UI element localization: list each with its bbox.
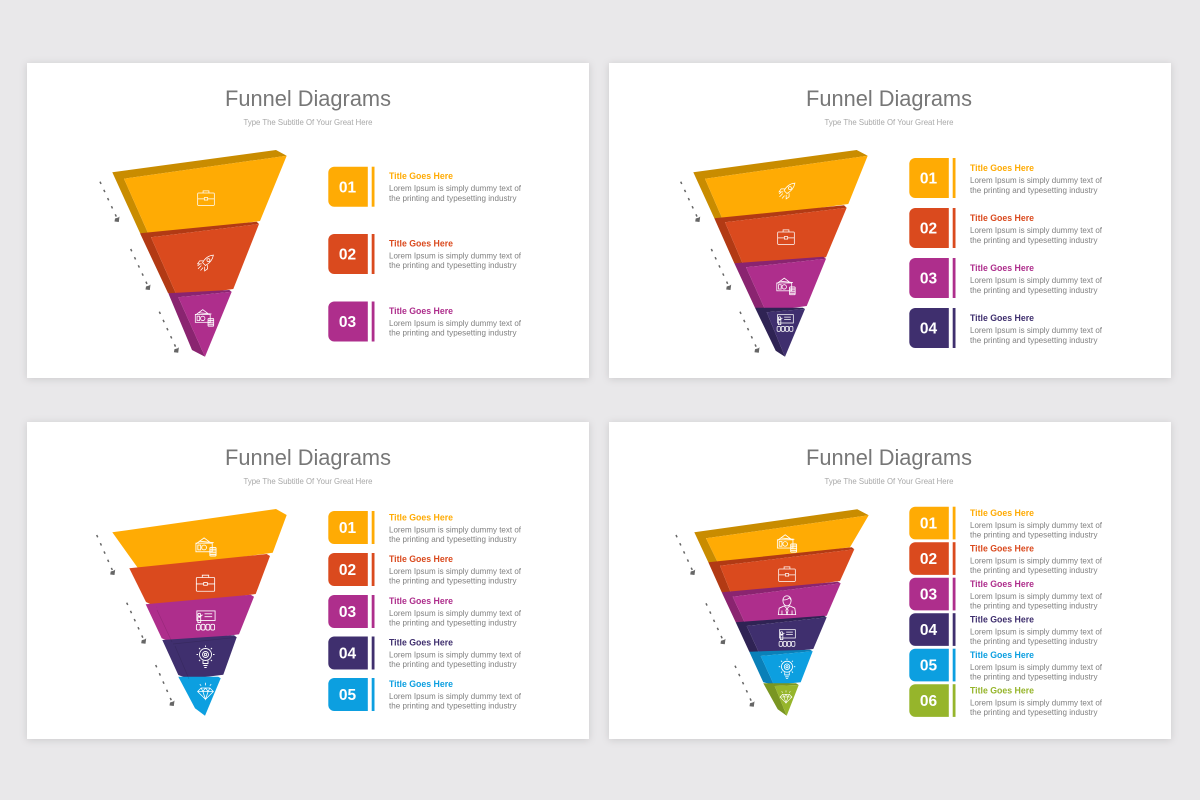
title: Funnel Diagrams [806,86,972,111]
arrows: dashed guides [97,535,174,706]
item 05: the printing and typesetting industry [389,700,517,710]
item 02: Title Goes Here [389,238,453,248]
item 02: Lorem Ipsum is simply dummy text of [970,225,1103,235]
icon: rocket [779,183,795,199]
item 03: Lorem Ipsum is simply dummy text of [970,591,1103,601]
item 01 [909,507,1103,539]
item 01: the printing and typesetting industry [389,193,517,203]
title: Funnel Diagrams [225,86,391,111]
item 04: Title Goes Here [970,313,1034,323]
item 05: Lorem Ipsum is simply dummy text of [970,662,1103,672]
item 04: Lorem Ipsum is simply dummy text of [389,650,522,660]
item 04: 04 [920,622,937,639]
item 03: 03 [339,314,356,331]
subtitle: Type The Subtitle Of Your Great Here [824,476,954,486]
item 01: Title Goes Here [389,512,453,522]
item 02: Lorem Ipsum is simply dummy text of [389,566,522,576]
item 04: the printing and typesetting industry [970,636,1098,646]
item 05: Title Goes Here [389,679,453,689]
item 03: the printing and typesetting industry [970,285,1098,295]
item 01: Lorem Ipsum is simply dummy text of [970,520,1103,530]
panel: six-step funnel slide [609,422,1171,739]
funnel: three layers [112,150,287,357]
item 01: the printing and typesetting industry [970,185,1098,195]
item 06: Lorem Ipsum is simply dummy text of [970,698,1103,708]
item 01: 01 [339,520,356,537]
icon: presentation [777,315,793,331]
item 02 [909,542,1103,575]
item 04: Lorem Ipsum is simply dummy text of [970,325,1103,335]
icon: presentation [196,611,215,630]
icon: wallet [196,538,216,556]
item 03: the printing and typesetting industry [389,618,517,628]
item 04 [909,613,1103,646]
icon: light bulb [196,646,214,668]
item 03: 03 [339,604,356,621]
item 05: Lorem Ipsum is simply dummy text of [389,691,522,701]
item 02: the printing and typesetting industry [970,235,1098,245]
item 04: 04 [920,321,937,338]
item 01: Lorem Ipsum is simply dummy text of [970,175,1103,185]
funnel: six layers [694,509,869,716]
arrows: dashed guides [100,182,179,353]
panel: three-step funnel slide [27,63,589,378]
item 01: Title Goes Here [970,508,1034,518]
item 04: the printing and typesetting industry [970,335,1098,345]
item 01: the printing and typesetting industry [970,529,1098,539]
icon: person [778,596,796,615]
icon: briefcase [779,567,795,582]
item 01: 01 [920,516,937,533]
arrows: dashed guides [681,182,760,353]
icon: wallet [777,535,797,552]
item 02 [909,208,1103,248]
icon: diamond [780,690,792,703]
icon: briefcase [778,230,794,244]
item 03: Lorem Ipsum is simply dummy text of [389,318,522,328]
subtitle: Type The Subtitle Of Your Great Here [244,117,373,127]
funnel: four layers [693,150,868,357]
icon: rocket [198,255,213,271]
title: Funnel Diagrams [225,445,391,470]
item 06: the printing and typesetting industry [970,707,1098,717]
item 06: Title Goes Here [970,686,1034,696]
item 06: 06 [920,693,937,710]
item 02 [328,553,522,586]
item 01: 01 [920,171,937,188]
icon: presentation [779,630,795,646]
item 05 [909,649,1103,681]
item 03 [909,578,1103,610]
item 02: the printing and typesetting industry [970,565,1098,575]
item 02: 02 [339,247,356,264]
item 03: Lorem Ipsum is simply dummy text of [970,275,1103,285]
item 03 [909,258,1103,298]
item 04: 04 [339,646,356,662]
item 03: 03 [920,271,937,288]
item 02: the printing and typesetting industry [389,260,517,270]
item 03: Title Goes Here [389,596,453,606]
item 04 [328,636,522,670]
item 01 [328,511,522,544]
item 02 [328,234,522,274]
icon: briefcase [198,191,214,206]
item 01: Title Goes Here [389,171,453,181]
item 02: Title Goes Here [389,554,453,564]
icon: diamond [198,683,213,699]
icon: wallet [195,310,214,326]
item 02: Title Goes Here [970,213,1034,223]
arrows: dashed guides [676,535,754,707]
item 03: Lorem Ipsum is simply dummy text of [389,608,522,618]
item 03: Title Goes Here [970,579,1034,589]
panel: five-step funnel slide [27,422,589,739]
item 04 [909,308,1103,348]
item 02: the printing and typesetting industry [389,576,517,586]
item 02: Lorem Ipsum is simply dummy text of [970,556,1103,566]
item 04: the printing and typesetting industry [389,659,517,669]
icon: wallet [777,278,795,295]
item 01 [328,167,522,207]
panel: four-step funnel slide [609,63,1171,378]
item 01: Lorem Ipsum is simply dummy text of [389,183,522,193]
item 03: Title Goes Here [970,263,1034,273]
item 04: Lorem Ipsum is simply dummy text of [970,626,1103,636]
item 03: Title Goes Here [389,306,453,316]
item 02: 02 [920,551,937,568]
item 01: 01 [339,179,356,196]
item 04: Title Goes Here [970,614,1034,624]
item 05 [328,678,522,711]
icon: briefcase [196,575,215,591]
item 05: 05 [920,658,937,675]
subtitle: Type The Subtitle Of Your Great Here [824,117,954,127]
item 01: Lorem Ipsum is simply dummy text of [389,524,522,534]
item 06 [909,684,1103,717]
item 02: Lorem Ipsum is simply dummy text of [389,250,522,260]
item 01: the printing and typesetting industry [389,534,517,544]
item 05: the printing and typesetting industry [970,671,1098,681]
funnel: five layers [112,509,287,716]
item 01: Title Goes Here [970,163,1034,173]
icon: light bulb [779,658,795,679]
item 02: 02 [339,562,356,579]
item 03: 03 [920,587,937,604]
item 03: the printing and typesetting industry [970,600,1098,610]
item 02: Title Goes Here [970,544,1034,554]
item 03 [328,302,522,342]
item 05: 05 [339,687,356,704]
title: Funnel Diagrams [806,445,972,470]
item 01 [909,158,1103,198]
item 05: Title Goes Here [970,650,1034,660]
item 03: the printing and typesetting industry [389,328,517,338]
item 04: Title Goes Here [389,638,453,648]
item 03 [328,595,522,628]
item 02: 02 [920,221,937,238]
subtitle: Type The Subtitle Of Your Great Here [244,476,373,486]
